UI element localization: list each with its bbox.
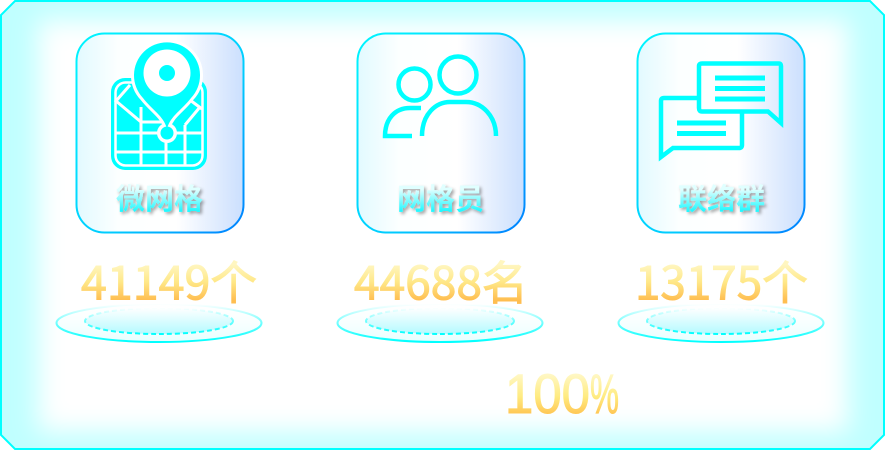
number: contact groups: 13175个 <box>635 248 808 314</box>
icon: chat bubbles <box>661 64 781 157</box>
label: micro grid: 微网格 <box>116 183 203 216</box>
number: micro grids: 41149个 <box>81 248 257 314</box>
number: coverage percent: % <box>590 362 619 425</box>
number: grid workers: 44688名 <box>354 248 528 314</box>
number: coverage percent: 100 <box>505 362 590 425</box>
panel: grid worker card <box>358 34 524 232</box>
pedestal: micro grid <box>56 304 262 342</box>
panel: contact group card <box>638 34 804 232</box>
panel: micro grid card <box>76 34 244 232</box>
icon: two people <box>385 56 496 136</box>
label: contact group: 联络群 <box>678 183 765 216</box>
label: grid worker: 网格员 <box>397 183 484 216</box>
pedestal: grid worker <box>338 304 542 342</box>
icon: map with location pin <box>111 42 207 170</box>
pedestal: contact group <box>618 304 824 342</box>
